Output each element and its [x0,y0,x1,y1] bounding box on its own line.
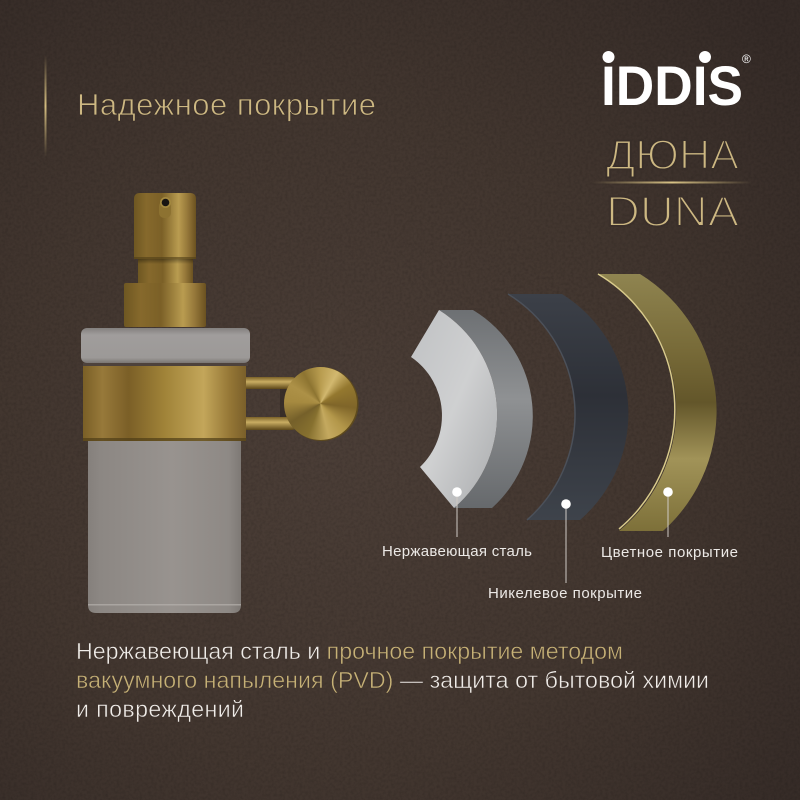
pump neck [138,259,193,283]
callout: colour coating [601,487,738,561]
callout: stainless steel: Нержавеющая сталь [382,543,532,560]
layer: colour coating [598,274,717,531]
title: Надежное покрытие [77,87,376,122]
series name: Дюна / Duna: ДЮНА [606,131,739,178]
callout: colour coating: Цветное покрытие [601,544,738,561]
series name: Дюна / Duna [592,131,752,236]
wall mount disc [284,367,358,441]
wall bracket rods [238,377,296,430]
description text: вакуумного напыления (PVD) — защита от бытовой химии [76,667,709,693]
description text: Нержавеющая сталь и прочное покрытие методом [76,638,623,664]
logo: IDDIS: IDDIS [601,54,743,117]
glass lid [81,328,250,363]
callout: nickel coating: Никелевое покрытие [488,585,642,602]
series name: Дюна / Duna: DUNA [606,188,739,236]
layer: nickel coating [508,294,628,520]
brass band [83,366,246,441]
description text: и повреждений [76,696,244,722]
logo: IDDIS: ® [742,52,751,66]
glass bottle [88,440,241,613]
layer: stainless steel [411,310,533,508]
product: soap dispenser [81,193,358,613]
layers diagram [382,274,738,602]
pump collar [124,283,206,327]
description text [76,638,709,722]
accent line [44,55,46,157]
callout: stainless steel [382,487,532,560]
pump head [134,193,196,259]
callout: nickel coating [488,499,642,602]
